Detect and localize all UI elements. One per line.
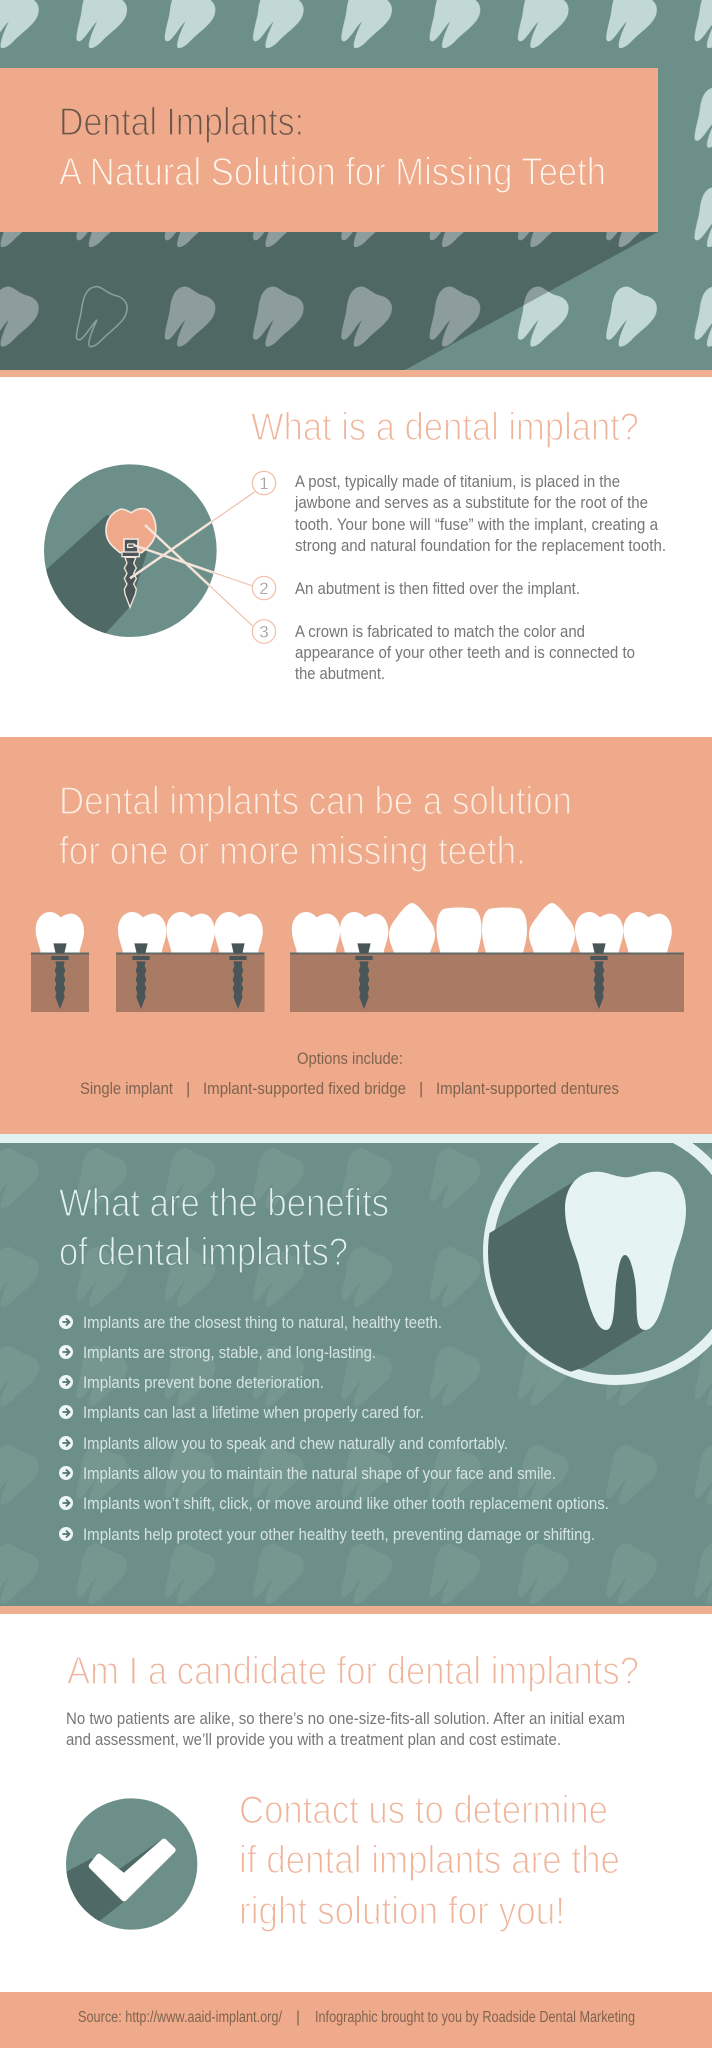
tooth badge [483, 1124, 712, 1383]
benefits list: Implants can last a lifetime when properly cared for. [83, 1404, 424, 1422]
implant diagram [37, 464, 255, 642]
step 1: 1 [259, 474, 269, 493]
title: Dental Implants: [59, 101, 304, 144]
options text [80, 1050, 619, 1098]
section: solution for missing teeth [0, 737, 712, 1134]
footer: | [296, 2009, 300, 2026]
benefits list: Implants won’t shift, click, or move around like other tooth replacement options. [83, 1495, 609, 1513]
call to action [239, 1789, 620, 1933]
implants [51, 943, 608, 1009]
hero banner [0, 0, 712, 377]
section: what is a dental implant [37, 406, 666, 683]
benefits list: Implants allow you to maintain the natural shape of your face and smile. [83, 1465, 556, 1483]
call to action: right solution for you! [239, 1890, 565, 1933]
long shadow [0, 232, 658, 370]
icon: check mark [60, 1798, 197, 1937]
step 1: tooth. Your bone will “fuse” with the implant, creating a [295, 516, 659, 534]
title panel [0, 68, 658, 232]
step 1: strong and natural foundation for the replacement tooth. [295, 537, 666, 555]
heading: Am I a candidate for dental implants? [67, 1650, 639, 1693]
heading [59, 1182, 389, 1274]
outlined tooth [70, 282, 132, 352]
options text: | [186, 1080, 190, 1098]
step 3 [252, 620, 635, 683]
options text: Options include: [297, 1050, 403, 1068]
step 3: appearance of your other teeth and is connected to [295, 644, 635, 662]
gum lines [31, 952, 684, 954]
paragraph [66, 1710, 625, 1749]
step 1: jawbone and serves as a substitute for the root of the [294, 494, 648, 512]
title [59, 101, 606, 194]
bottom stripe [0, 370, 712, 377]
paragraph: No two patients are alike, so there’s no one-size-fits-all solution. After an initial exam [66, 1710, 625, 1728]
heading: What are the benefits [59, 1182, 389, 1225]
heading: for one or more missing teeth. [59, 830, 526, 873]
call to action: Contact us to determine [239, 1789, 608, 1832]
step 1 [252, 471, 666, 555]
step 2: 2 [259, 579, 269, 598]
options text: Single implant [80, 1080, 173, 1098]
step 2: An abutment is then fitted over the implant. [295, 580, 580, 598]
paragraph: and assessment, we’ll provide you with a treatment plan and cost estimate. [66, 1731, 561, 1749]
options text: Implant-supported fixed bridge [203, 1080, 406, 1098]
step 2 [252, 576, 580, 600]
benefits list: Implants are the closest thing to natural, healthy teeth. [83, 1314, 442, 1332]
options text: Implant-supported dentures [436, 1080, 619, 1098]
heading [59, 780, 572, 873]
benefits list: Implants help protect your other healthy teeth, preventing damage or shifting. [83, 1526, 595, 1544]
footer: Infographic brought to you by Roadside Dental Marketing [315, 2009, 635, 2026]
benefits list: Implants allow you to speak and chew naturally and comfortably. [83, 1435, 508, 1453]
call to action: if dental implants are the [239, 1839, 620, 1882]
footer: Source: http://www.aaid-implant.org/ [78, 2009, 283, 2026]
footer [0, 1992, 712, 2048]
benefits list [59, 1314, 609, 1544]
section: benefits [0, 1124, 712, 1614]
benefits list: Implants prevent bone deterioration. [83, 1374, 324, 1392]
section: candidate [60, 1650, 639, 1937]
benefits list: Implants are strong, stable, and long-lasting. [83, 1344, 376, 1362]
white teeth [36, 903, 672, 953]
step 3: A crown is fabricated to match the color and [295, 623, 585, 641]
step 3: 3 [259, 622, 269, 642]
gum blocks [31, 953, 684, 1012]
heading: of dental implants? [59, 1231, 348, 1274]
step 3: the abutment. [295, 665, 385, 683]
heading: What is a dental implant? [251, 406, 639, 449]
heading: Dental implants can be a solution [59, 780, 572, 823]
bottom stripe [0, 1606, 712, 1614]
options text: | [419, 1080, 423, 1098]
step 1: A post, typically made of titanium, is placed in the [295, 473, 620, 491]
title: A Natural Solution for Missing Teeth [59, 151, 606, 194]
